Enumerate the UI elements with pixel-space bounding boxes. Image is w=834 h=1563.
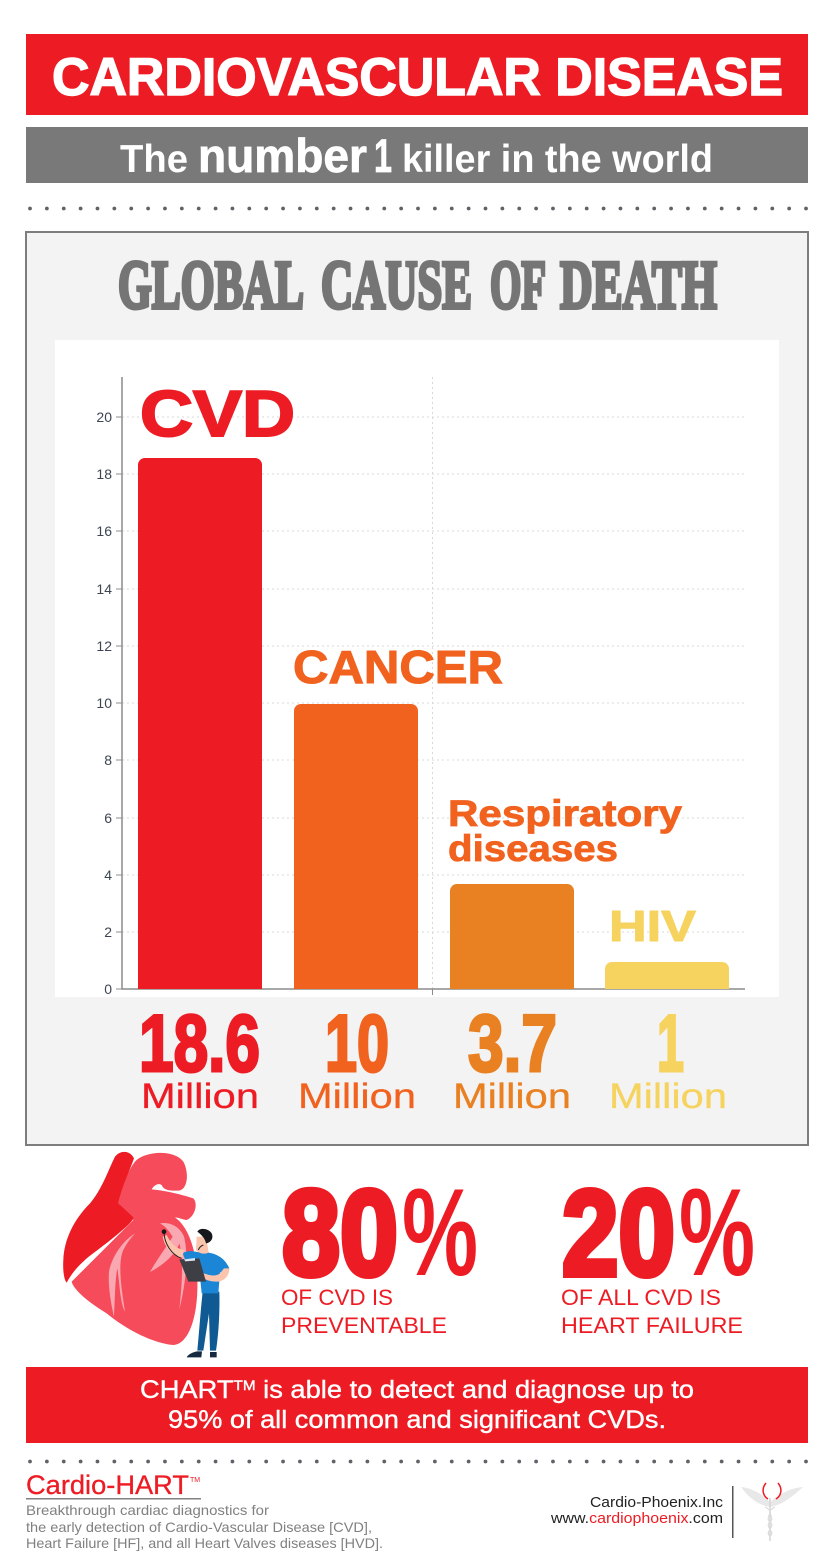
bar: HIV (605, 962, 729, 989)
axis labels: 6 (104, 810, 112, 826)
bar: cancer (294, 704, 418, 989)
subtitle banner (26, 127, 808, 183)
bar: CVD (138, 458, 262, 989)
callout: CHART capability: 95% of all common and significant CVDs. (168, 1406, 666, 1434)
stat: 20 percent: 20 (562, 1165, 675, 1301)
value: 18.6 million: Million (141, 1077, 259, 1116)
axis labels (96, 409, 112, 997)
subtitle banner: The (120, 138, 188, 181)
subtitle banner: killer in the world (402, 138, 713, 181)
axis labels: 18 (96, 466, 112, 482)
callout: CHART capability (26, 1367, 808, 1443)
axis labels: 0 (104, 981, 112, 997)
subtitle banner: 1 (374, 129, 392, 182)
footer: company contact: Cardio-Phoenix.Inc (590, 1494, 724, 1511)
label: respiratory diseases: Respiratory (448, 793, 682, 834)
icon: caduceus logo (741, 1483, 803, 1541)
label: respiratory diseases (448, 793, 682, 869)
icon: heart with doctor (63, 1152, 229, 1357)
callout: CHART capability: CHART (140, 1376, 226, 1404)
axis labels: 10 (96, 695, 112, 711)
heading: GLOBAL (118, 247, 304, 323)
label: respiratory diseases: diseases (448, 828, 618, 869)
value: 10 million: 10 (325, 999, 389, 1089)
axis labels: 14 (96, 581, 112, 597)
title banner: CARDIOVASCULAR DISEASE (52, 48, 783, 107)
footer: Cardio-HART brand: Heart Failure [HF], and all Heart Valves diseases [HVD]. (26, 1535, 383, 1551)
label: HIV: HIV (609, 902, 697, 951)
stat: 20 percent: HEART FAILURE (561, 1313, 743, 1338)
heading (118, 247, 717, 323)
stat: 80 percent (281, 1164, 478, 1338)
label: cancer: CANCER (293, 641, 503, 693)
axis labels: 8 (104, 752, 112, 768)
stat: 20 percent: % (679, 1164, 755, 1302)
bar chart (55, 340, 779, 997)
footer: Cardio-HART brand: the early detection of Cardio-Vascular Disease [CVD], (26, 1519, 372, 1535)
callout: CHART capability: is able to detect and diagnose up to (256, 1376, 694, 1404)
axis labels: 12 (96, 638, 112, 654)
label: CVD: CVD (140, 377, 295, 450)
axis labels: 2 (104, 924, 112, 940)
footer: company contact: www.cardiophoenix .com (550, 1510, 723, 1527)
value: 10 million: Million (298, 1077, 416, 1116)
value: 1 million: 1 (657, 999, 684, 1089)
heading: CAUSE (321, 247, 472, 323)
value: 10 million (298, 999, 416, 1116)
value: 3.7 million: 3.7 (468, 999, 557, 1089)
stat: 80 percent: OF CVD IS (281, 1285, 393, 1310)
axis labels: 4 (104, 867, 112, 883)
footer: Cardio-HART brand: TM (190, 1477, 200, 1484)
heading: OF (490, 247, 546, 323)
panel: global cause of death (26, 232, 808, 1145)
bar: respiratory diseases (450, 884, 574, 989)
footer: company contact (550, 1494, 724, 1527)
callout: CHART capability: TM (234, 1377, 256, 1393)
stat: 80 percent: % (402, 1164, 478, 1302)
title banner (26, 34, 808, 115)
value: 18.6 million (139, 999, 260, 1116)
stat: 20 percent: OF ALL CVD IS (561, 1285, 721, 1310)
value: 3.7 million (453, 999, 571, 1116)
axis labels: 16 (96, 523, 112, 539)
value: 1 million (609, 999, 727, 1116)
heading: DEATH (560, 247, 717, 323)
value: 1 million: Million (609, 1077, 727, 1116)
stat: 80 percent: PREVENTABLE (281, 1313, 447, 1338)
subtitle banner: number (198, 129, 367, 182)
doctor (162, 1229, 229, 1357)
value: 18.6 million: 18.6 (139, 999, 260, 1089)
stat: 20 percent (561, 1164, 755, 1338)
footer: Cardio-HART brand: Cardio-HART (26, 1470, 189, 1500)
footer: Cardio-HART brand: Breakthrough cardiac diagnostics for (26, 1502, 269, 1518)
axis labels: 20 (96, 409, 112, 425)
footer: Cardio-HART brand (26, 1470, 383, 1551)
stat: 80 percent: 80 (282, 1165, 398, 1301)
value: 3.7 million: Million (453, 1077, 571, 1116)
